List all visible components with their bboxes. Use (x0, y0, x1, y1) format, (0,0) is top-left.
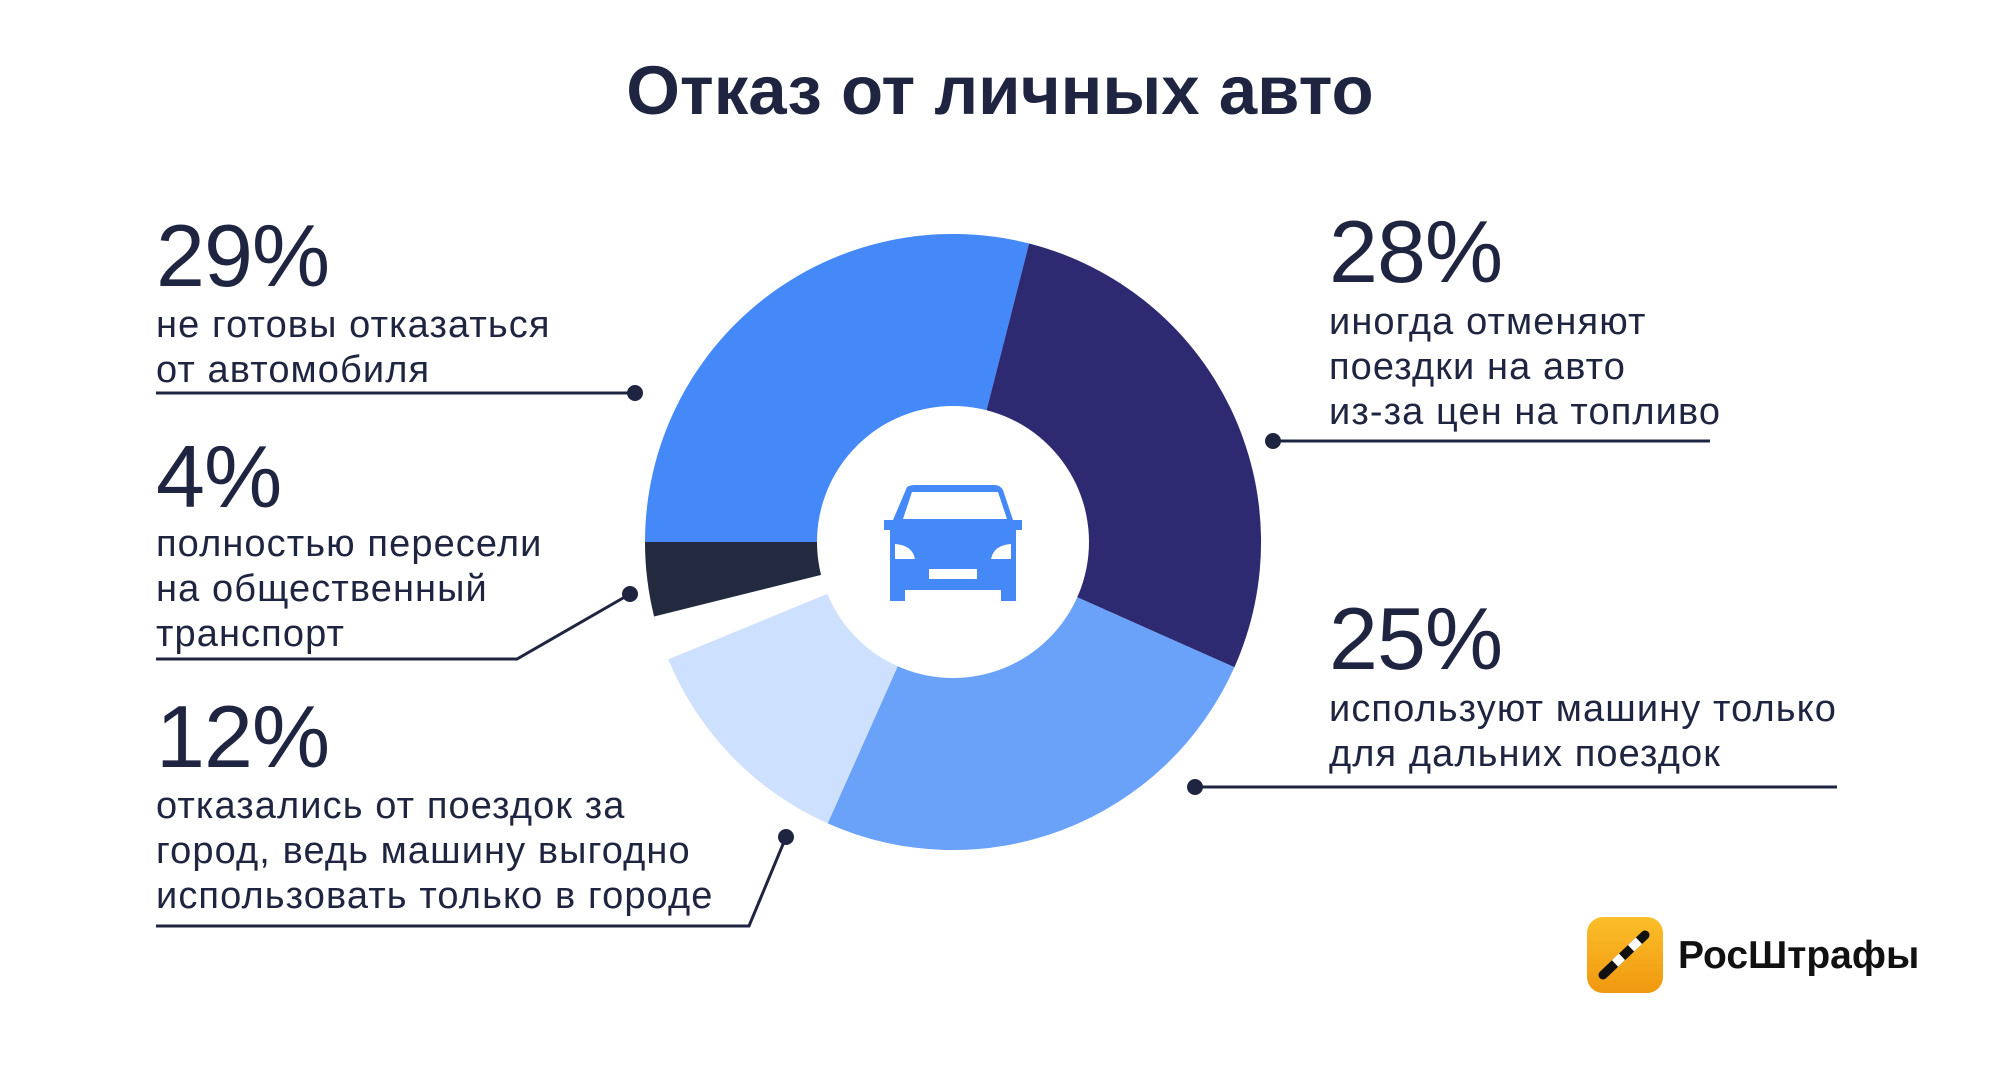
callout: 28% (1329, 202, 1721, 433)
callout: 12%: отказались от поездок за (156, 785, 626, 827)
callout: 29%: не готовы отказаться (156, 304, 551, 346)
callout: 12%: 12% (156, 687, 329, 786)
callout: 12% (156, 687, 713, 917)
callout: 28%: иногда отменяют (1329, 301, 1646, 343)
callout: 29%: от автомобиля (156, 349, 430, 391)
callout: 28%: из-за цен на топливо (1329, 391, 1721, 433)
callout: 12%: город, ведь машину выгодно (156, 830, 691, 872)
icon: car (884, 485, 1022, 601)
callout: 4%: полностью пересели (156, 523, 542, 565)
center circle (817, 406, 1089, 678)
segment: 12% (668, 542, 953, 823)
callout: 28%: 28% (1329, 202, 1502, 301)
icon: logo badge (1587, 917, 1663, 993)
segment: 25% (828, 542, 1234, 850)
callout: 4%: на общественный (156, 568, 488, 610)
callout: 25%: 25% (1329, 589, 1502, 688)
callout: 4%: транспорт (156, 613, 345, 655)
callout: 28%: поездки на авто (1329, 346, 1626, 388)
segment: 29% (645, 234, 1029, 542)
callout: 4%: 4% (156, 427, 281, 526)
brand name: РосШтрафы (1678, 934, 1919, 977)
callout: 25%: для дальних поездок (1329, 733, 1721, 775)
callout: 4% (156, 427, 542, 655)
segment: 4% (645, 542, 953, 616)
callout: 29%: 29% (156, 206, 329, 305)
callout: 25% (1329, 589, 1837, 775)
segment: 28% (953, 244, 1261, 667)
title: Отказ от личных авто (626, 52, 1374, 129)
logo (1587, 917, 1919, 993)
leader lines (156, 393, 1837, 926)
callout: 25%: используют машину только (1329, 688, 1837, 730)
callout: 12%: использовать только в городе (156, 875, 713, 917)
callout: 29% (156, 206, 551, 391)
